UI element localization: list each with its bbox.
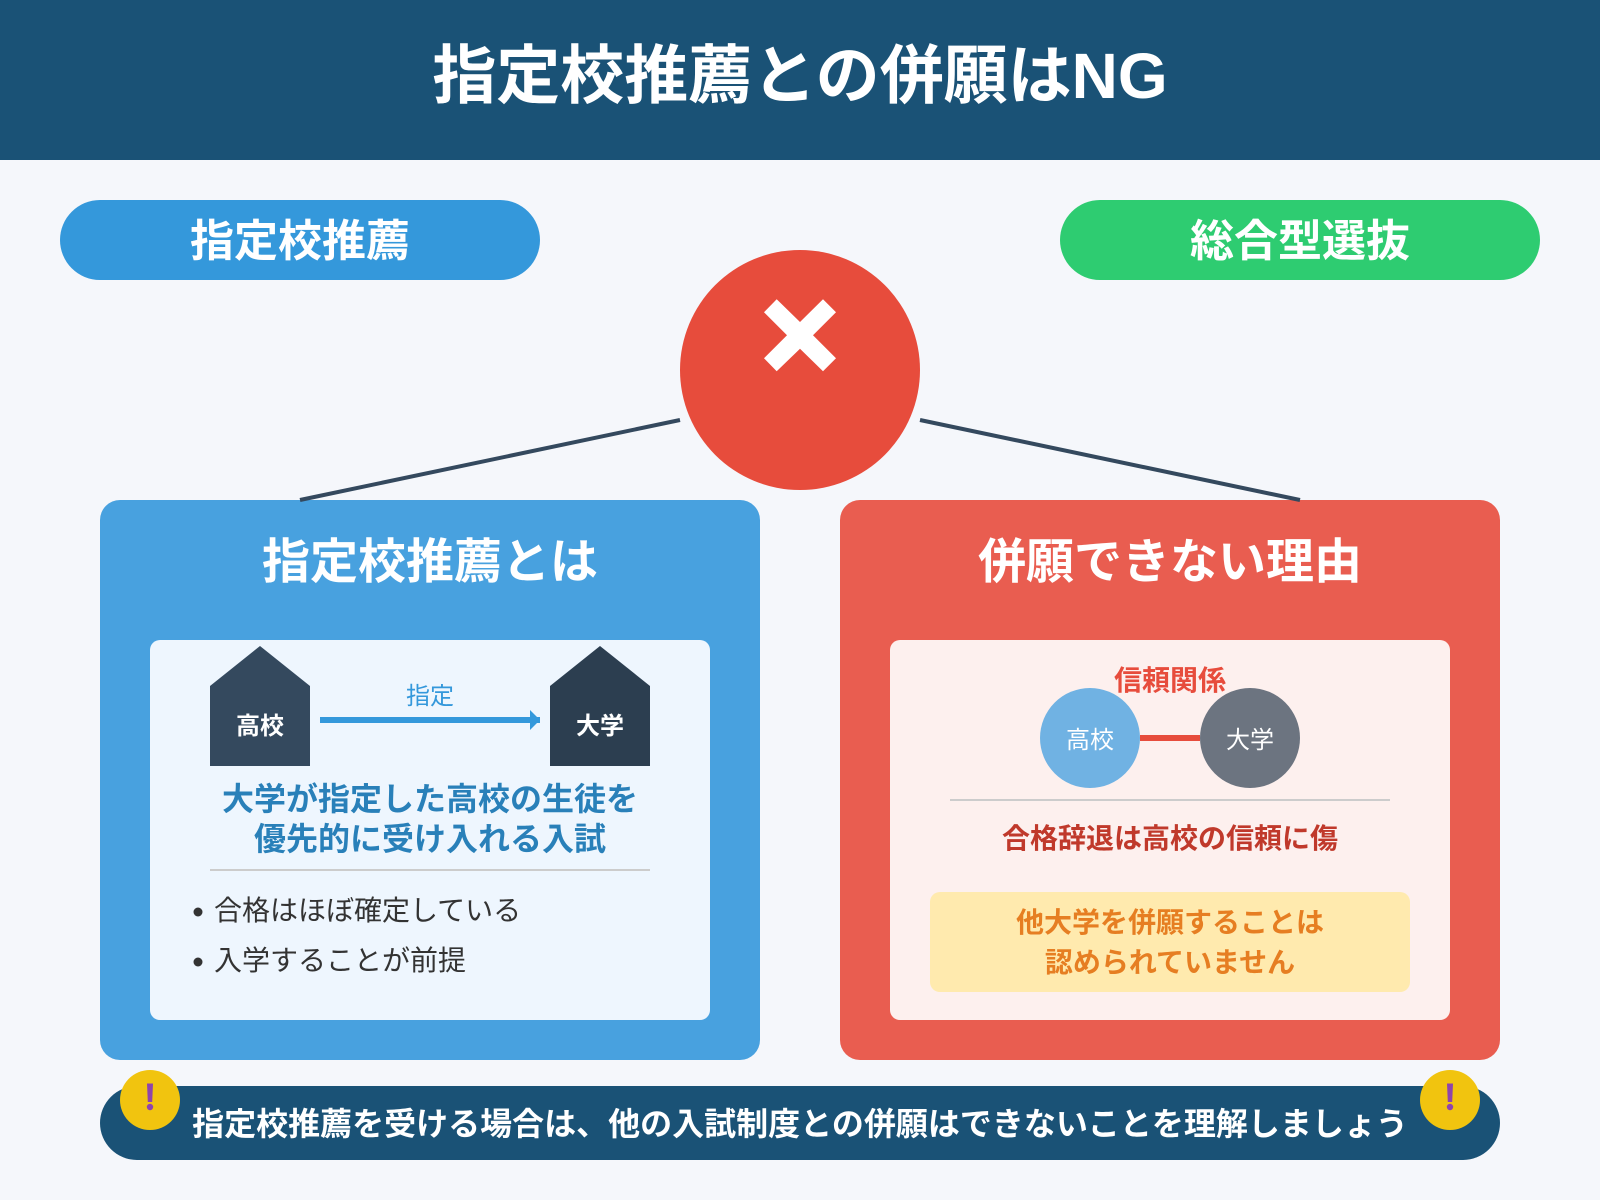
panel: 併願できない理由: [840, 500, 1500, 1060]
pill: 指定校推薦: [60, 200, 540, 280]
bottom message bar: [100, 1086, 1500, 1160]
trust label: 信頼関係: [1114, 665, 1226, 696]
callout: 認められていません: [1045, 947, 1295, 978]
reason text: 合格辞退は高校の信頼に傷: [1002, 823, 1338, 854]
node: university: 大学: [1226, 727, 1274, 754]
inner card: [150, 640, 710, 1020]
definition text: 優先的に受け入れる入試: [254, 821, 606, 857]
pill: 総合型選抜: 総合型選抜: [1190, 217, 1410, 266]
pill: 指定校推薦: 指定校推薦: [190, 217, 410, 266]
icon: warning left: [120, 1070, 180, 1130]
bottom message bar: 指定校推薦を受ける場合は、他の入試制度との併願はできないことを理解しましょう: [192, 1106, 1408, 1142]
icon: university building: [550, 646, 650, 766]
definition text: 大学が指定した高校の生徒を: [222, 781, 638, 817]
icon: high school building: 高校: [236, 713, 284, 740]
bullet list: [194, 895, 521, 976]
panel heading: 指定校推薦とは: [262, 536, 598, 589]
pill: 総合型選抜: [1060, 200, 1540, 280]
node: high school: [1040, 688, 1140, 788]
connector line: right: [920, 420, 1300, 500]
arrow: [320, 710, 540, 730]
inner card: [890, 640, 1450, 1020]
icon: red circle with cross: [680, 250, 920, 490]
icon: high school building: [210, 646, 310, 766]
connector line: left: [300, 420, 680, 500]
panel: 指定校推薦とは: [100, 500, 760, 1060]
icon: warning right: [1420, 1070, 1480, 1130]
bullet list: 入学することが前提: [214, 945, 466, 976]
panel heading: 併願できない理由: [978, 536, 1362, 589]
node: university: [1200, 688, 1300, 788]
callout: 他大学を併願することは: [1016, 907, 1324, 938]
bullet list: 合格はほぼ確定している: [214, 895, 521, 926]
trust link line: [1140, 735, 1200, 741]
definition text: [222, 781, 638, 857]
title banner: [0, 0, 1600, 160]
node: high school: 高校: [1066, 727, 1114, 754]
icon: university building: 大学: [576, 713, 624, 740]
arrow label: 指定: [406, 683, 454, 710]
title: 指定校推薦との併願はNG: [432, 40, 1168, 112]
callout: [930, 892, 1410, 992]
